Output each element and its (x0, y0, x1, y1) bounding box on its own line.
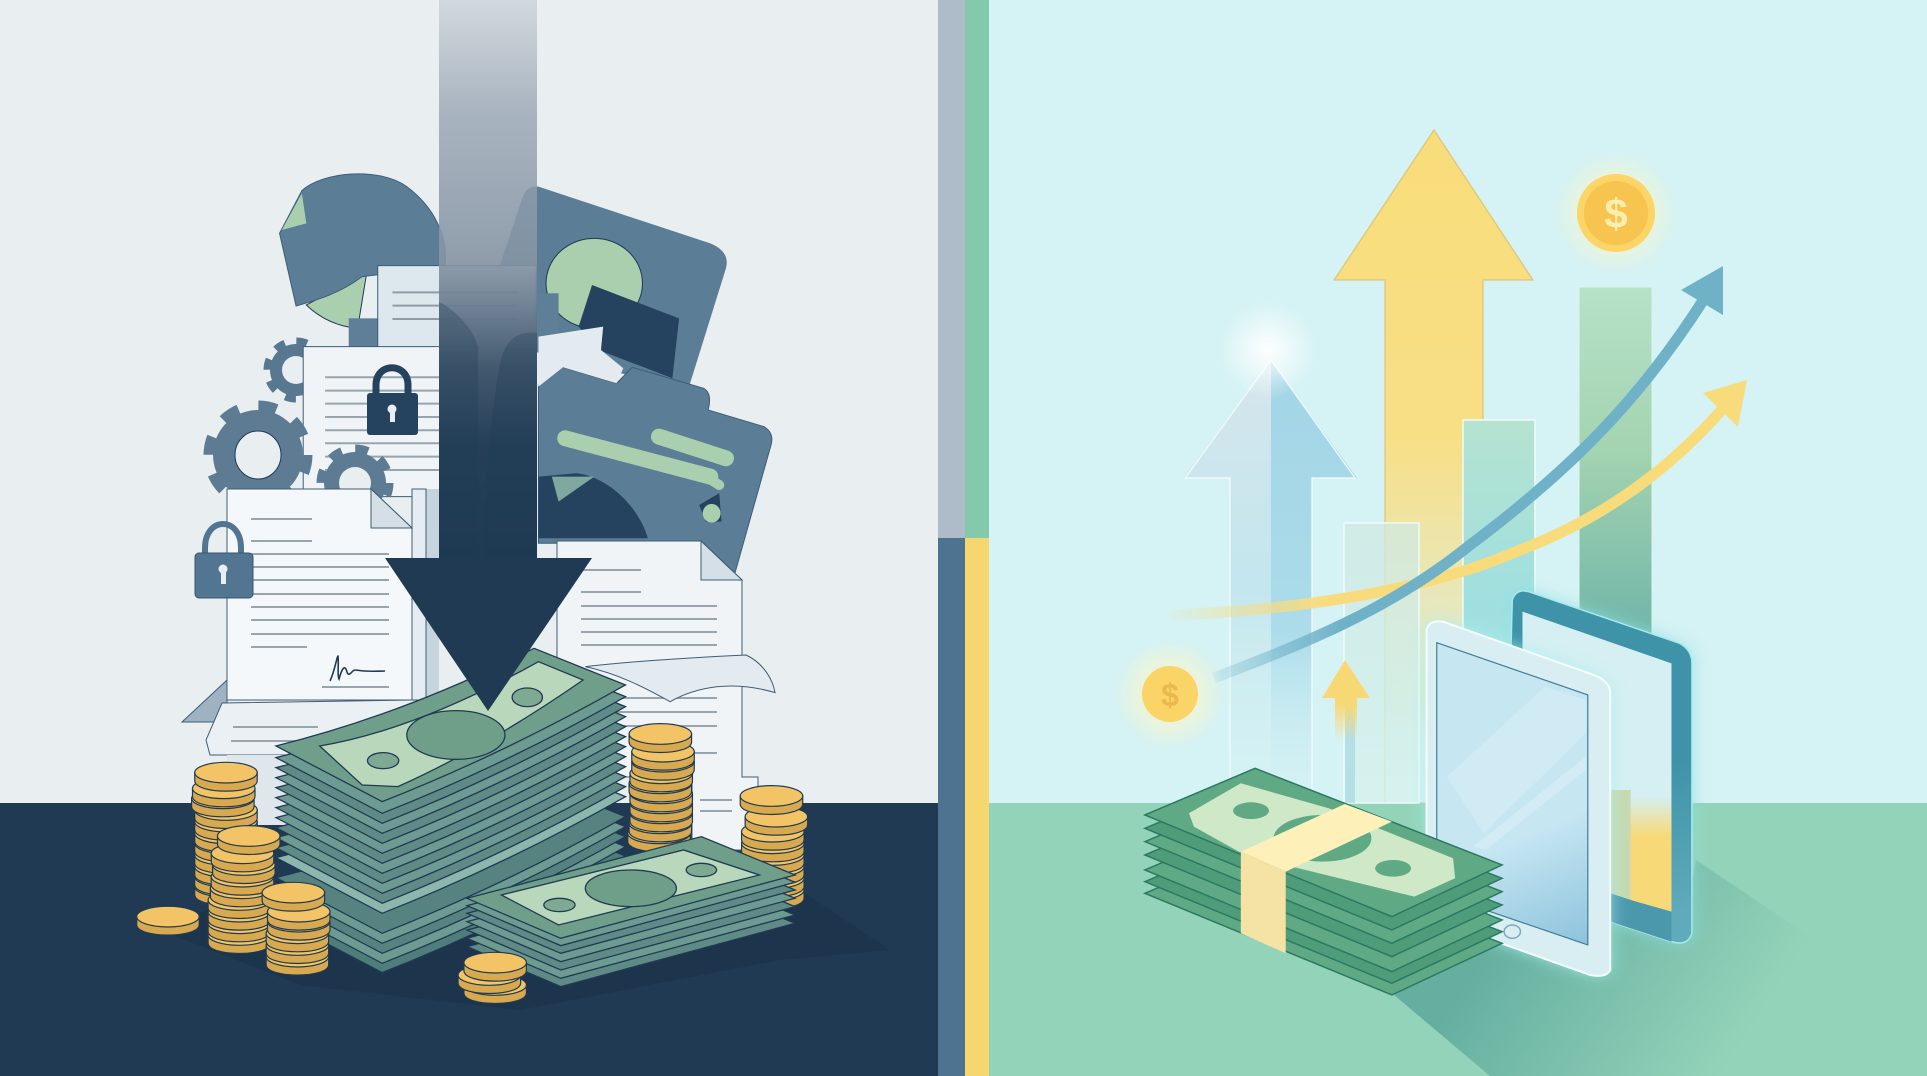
icon: dollar coin top right: $ (1604, 190, 1628, 237)
icon: back tablet (1508, 591, 1692, 943)
bill face (1189, 783, 1455, 897)
document: signed page with folded corner (227, 489, 412, 700)
chart line: yellow rising arrow (1169, 380, 1747, 615)
panel: right background wall (989, 0, 1927, 803)
money pile: small stack of bills (467, 837, 795, 987)
floor shadow under tablets and cash (1394, 860, 1830, 1076)
arrow: small yellow rising arrow (1322, 660, 1370, 803)
divider: blue-grey band (938, 0, 965, 1076)
chart line: blue rising arrow (1214, 266, 1723, 678)
document: back sheet (349, 266, 559, 349)
screen glare (1447, 687, 1586, 833)
money pile: large stack of bills (276, 648, 626, 973)
bar chart: three translucent bars (1344, 287, 1652, 803)
icon: blue padlock (195, 524, 253, 598)
icon: medium gear (321, 449, 389, 517)
panel: right green floor (989, 803, 1927, 1076)
icon: dark padlock (367, 368, 418, 435)
document: sheets behind the signed page (182, 489, 470, 825)
top bill face (320, 662, 583, 787)
panel: left background wall (0, 0, 938, 803)
icon: large gear (210, 407, 306, 503)
panel: left dark floor (0, 803, 938, 1076)
coin stacks behind money (628, 724, 808, 908)
signature (330, 656, 385, 681)
money: banded stack of cash (1145, 768, 1502, 995)
icon: tilted blue card at back right (501, 186, 727, 390)
document: locked sheet (303, 347, 478, 497)
document: right page with folded corner (557, 541, 758, 850)
arrow: pale blue rising arrow (1183, 300, 1357, 800)
icon: small dollar coin left: $ (1161, 677, 1179, 713)
arrow: tall yellow rising arrow (1334, 130, 1533, 803)
floor shadow under money pile (160, 870, 890, 1010)
document pile (182, 174, 775, 850)
icon: dollar coin top right (1554, 151, 1678, 275)
icon: front glass tablet (1427, 621, 1610, 976)
document: curled receipt (585, 655, 775, 702)
arrow: large dark downward arrow (385, 0, 592, 711)
icon: rounded blue folder at back left (280, 174, 445, 328)
icon: small dollar coin left (1114, 638, 1226, 750)
icon: small gear (267, 341, 325, 399)
coin stacks in front (137, 762, 526, 1003)
divider: green and yellow band (965, 0, 989, 1076)
icon: blue folder with green labels (538, 327, 772, 573)
paper band (1241, 804, 1392, 872)
